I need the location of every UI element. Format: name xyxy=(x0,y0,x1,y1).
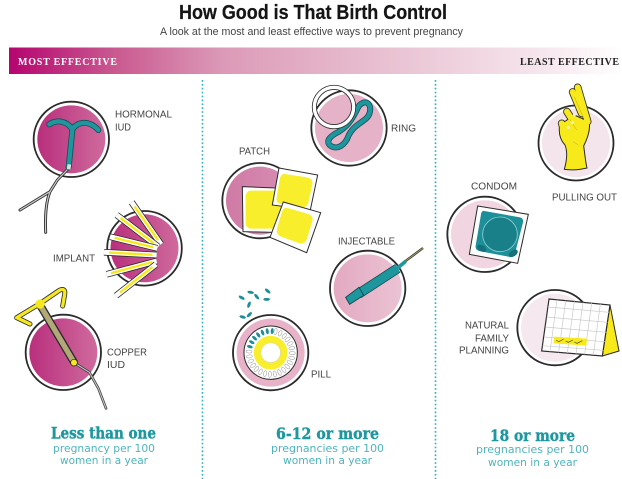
icon: condom xyxy=(447,197,528,272)
label: natural family planning: NATURAL xyxy=(465,320,509,332)
icon: ring xyxy=(311,87,387,166)
icon: hormonal IUD xyxy=(20,102,109,232)
label: injectable: INJECTABLE xyxy=(338,236,395,248)
icon: copper IUD xyxy=(17,290,106,408)
label: hormonal IUD: IUD xyxy=(115,122,131,134)
label: implant: IMPLANT xyxy=(53,254,95,264)
label: pill: PILL xyxy=(311,370,331,380)
panel: moderately effective xyxy=(222,87,423,467)
label: patch: PATCH xyxy=(239,146,270,158)
stat: less than one: Less than one xyxy=(51,424,156,442)
label: copper IUD: COPPER xyxy=(107,348,147,358)
label: natural family planning: PLANNING xyxy=(459,346,509,356)
stat: less than one: women in a year xyxy=(60,454,148,467)
stat: 6-12 or more: pregnancies per 100 xyxy=(271,442,384,455)
panel: least effective xyxy=(447,87,619,469)
panel: most effective xyxy=(17,102,182,467)
stat: 6-12 or more xyxy=(271,424,384,467)
icon: crossed fingers xyxy=(538,87,614,180)
icon: pill pack xyxy=(233,288,308,390)
effectiveness gradient bar xyxy=(9,48,622,74)
title: How Good is That Birth Control xyxy=(179,2,447,24)
label: hormonal IUD xyxy=(115,110,172,134)
label: condom: CONDOM xyxy=(471,182,517,192)
icon: patch xyxy=(222,163,321,253)
stat: less than one: pregnancy per 100 xyxy=(53,442,155,455)
label: copper IUD: IUD xyxy=(107,360,125,371)
stat: 18 or more: 18 or more xyxy=(490,426,575,445)
label: ring: RING xyxy=(391,124,416,134)
label: pulling out: PULLING OUT xyxy=(552,192,617,204)
subtitle: A look at the most and least effective ways to prevent pregnancy xyxy=(160,26,463,38)
label: copper IUD xyxy=(107,348,147,371)
stat: 18 or more: women in a year xyxy=(488,456,577,469)
label: hormonal IUD: HORMONAL xyxy=(115,110,172,120)
label: natural family planning: FAMILY xyxy=(475,334,509,344)
stat: 18 or more: pregnancies per 100 xyxy=(476,443,589,456)
stat: 18 or more xyxy=(476,426,589,469)
stat: less than one xyxy=(51,424,156,467)
icon: injectable xyxy=(330,248,423,326)
effectiveness gradient bar: LEAST EFFECTIVE xyxy=(520,57,619,68)
stat: 6-12 or more: 6-12 or more xyxy=(276,424,379,443)
label: natural family planning xyxy=(459,320,509,356)
icon: implant xyxy=(104,202,182,296)
icon: calendar xyxy=(517,290,619,365)
effectiveness gradient bar: MOST EFFECTIVE xyxy=(18,57,117,68)
stat: 6-12 or more: women in a year xyxy=(283,454,372,467)
